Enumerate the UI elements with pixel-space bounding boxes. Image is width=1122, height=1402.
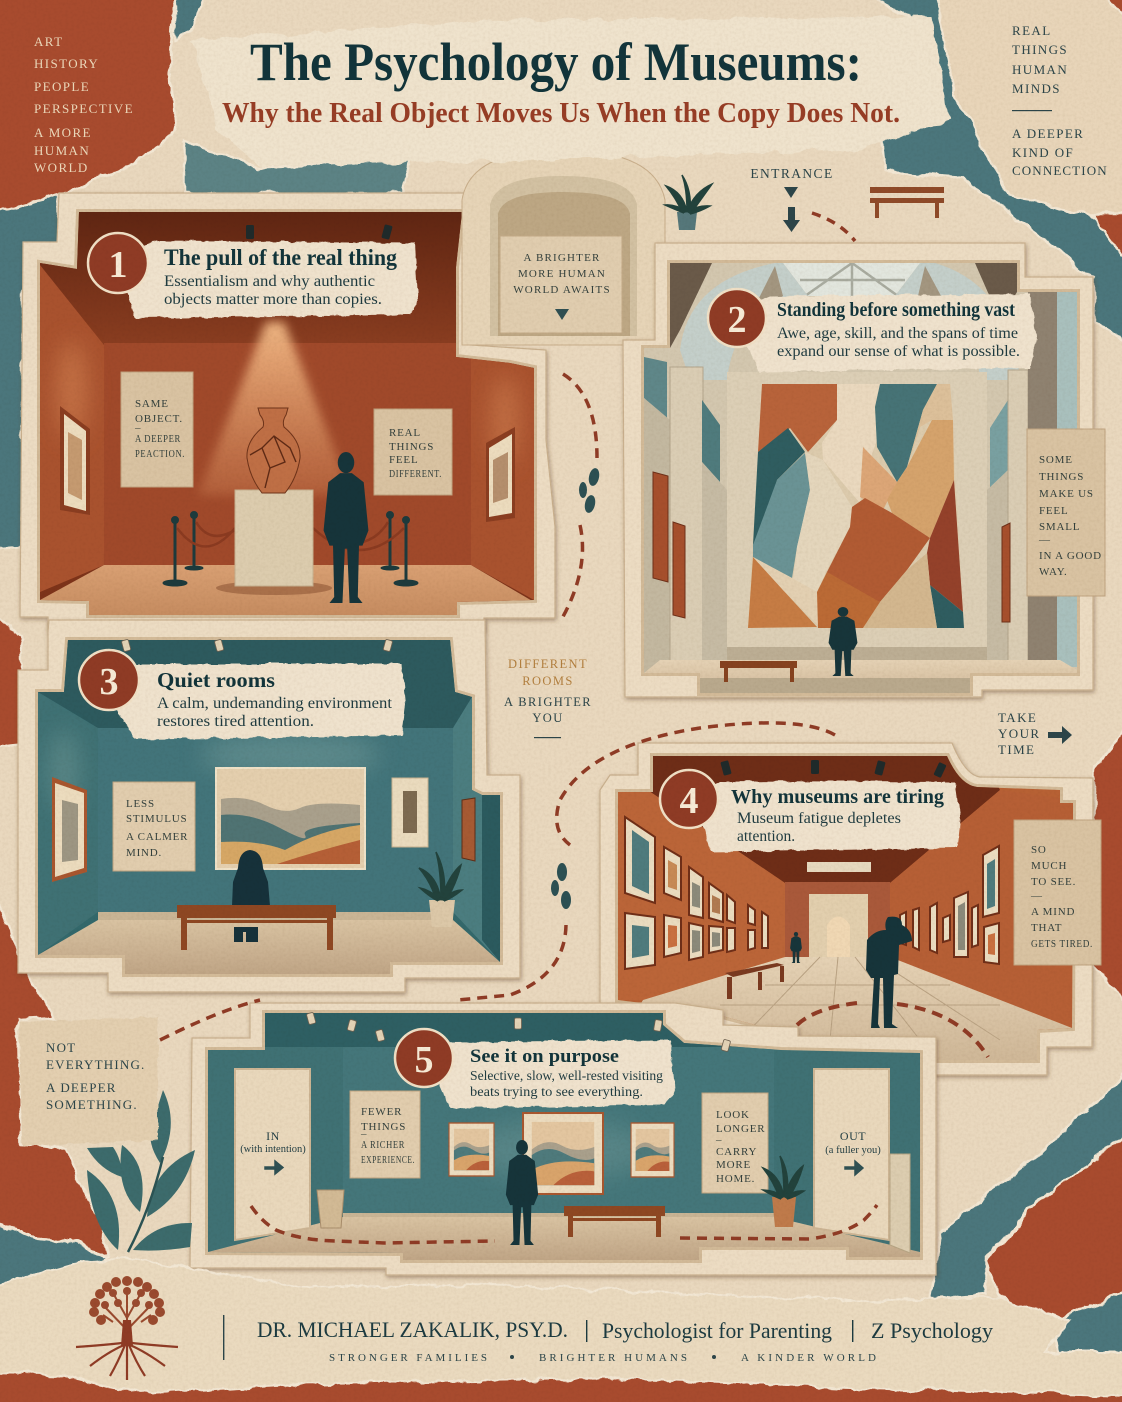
track lights: [121, 639, 393, 652]
take your time: YOUR: [998, 726, 1040, 741]
artworks: [449, 1113, 674, 1194]
centre caption: A BRIGHTER: [504, 695, 592, 709]
vase: [247, 408, 300, 493]
frame: left wall: [52, 777, 87, 882]
note paper: not everything: A DEEPER: [46, 1080, 117, 1095]
sign: fewer things: [350, 1091, 420, 1178]
sign: same object: [121, 372, 193, 487]
top right tagline: [1012, 23, 1108, 178]
sign: same object: PEACTION.: [135, 448, 185, 460]
sign: look longer: CARRY: [716, 1146, 757, 1158]
sign: look longer: LONGER: [716, 1123, 765, 1135]
sign: so much to see: [1014, 820, 1101, 965]
picture contents left: [632, 830, 720, 958]
sign: so much to see: —: [1030, 890, 1043, 902]
room 2 interior: [640, 258, 1085, 698]
right wall: [453, 697, 500, 962]
tired visitor: [866, 917, 912, 1028]
sign: brighter world: [500, 236, 622, 333]
note paper: not everything: NOT: [46, 1040, 76, 1055]
label: 1: The pull of the real thing: [164, 245, 397, 270]
dashed path through room: [251, 1205, 877, 1243]
room 3 interior: [30, 635, 510, 980]
left inner wall: [702, 462, 727, 660]
sign: fewer things: THINGS: [361, 1121, 406, 1133]
door: in: (with intention): [240, 1144, 306, 1155]
framed pictures left: [625, 817, 768, 969]
visitor: [324, 452, 368, 603]
sign: feel small: FEEL: [1039, 505, 1068, 517]
sign: so much to see: SO: [1031, 844, 1047, 856]
ceiling: [38, 635, 472, 728]
top right tagline: CONNECTION: [1012, 163, 1108, 178]
label: 2: expand our sense of what is possible.: [777, 343, 1020, 360]
footprints lower: [551, 863, 571, 909]
sign: real things: FEEL: [389, 454, 418, 466]
room 1 interior: [30, 205, 540, 620]
label: 4: attention.: [737, 828, 795, 845]
entrance bench: [870, 187, 944, 218]
sign: look longer: MORE: [716, 1159, 751, 1171]
spotlight: [198, 322, 352, 495]
sign: feel small: WAY.: [1039, 566, 1068, 578]
right teal wall: [1057, 292, 1077, 667]
sign: feel small: THINGS: [1039, 471, 1084, 483]
label: 3: A calm, undemanding environment: [157, 695, 393, 712]
back wall: [785, 882, 890, 957]
floor: [200, 1217, 920, 1265]
left teal window: [702, 400, 720, 482]
right inner wall: [987, 470, 1008, 660]
top left tagline: A MORE: [34, 125, 92, 140]
sign: feel small: SOME: [1039, 454, 1073, 466]
label: 2: [708, 289, 1037, 372]
floor: [644, 660, 1077, 698]
label: 1: objects matter more than copies.: [164, 291, 382, 308]
sign: real things: REAL: [389, 427, 421, 439]
ceiling: [40, 205, 480, 345]
top left tagline: ART: [34, 34, 63, 49]
bench: [725, 963, 784, 999]
label: 5: 5: [414, 1039, 434, 1081]
right column: [1008, 370, 1028, 667]
vault arches: [680, 263, 1020, 380]
frame: left wall: [60, 406, 90, 515]
entrance marker: [750, 166, 834, 232]
icon: tree logo: [76, 1276, 178, 1380]
label: 3: [79, 650, 406, 739]
top left tagline: [34, 34, 134, 175]
top left tagline: PEOPLE: [34, 79, 90, 94]
dashed walking path: centre: [160, 374, 835, 1040]
centre caption: [504, 657, 592, 738]
label: 2: Standing before something vast: [777, 299, 1015, 321]
top right tagline: A DEEPER: [1012, 126, 1084, 141]
label: 2: Awe, age, skill, and the spans of time: [777, 325, 1018, 342]
visitor: [506, 1140, 538, 1245]
entrance marker: ENTRANCE: [750, 166, 834, 181]
footer tagline: BRIGHTER HUMANS: [539, 1352, 687, 1364]
doorway: [809, 894, 868, 958]
panel: room 2 standing before something vast: [623, 243, 1105, 698]
track lights: [246, 224, 393, 240]
door: out: (a fuller you): [825, 1145, 881, 1156]
dashed trail from entrance: [812, 213, 855, 241]
door: in: [235, 1069, 310, 1240]
centre caption: YOU: [532, 711, 564, 725]
plant: [763, 1156, 804, 1227]
right teal window: [990, 400, 1008, 490]
wastebasket: [317, 1190, 344, 1228]
take your time: TAKE: [998, 710, 1037, 725]
icon: botanical leaves: [87, 1090, 195, 1252]
label: 5: Selective, slow, well-rested visiting: [470, 1068, 663, 1083]
back wall: [98, 728, 453, 912]
right wall: [471, 350, 534, 600]
footer credits: Z Psychology: [871, 1318, 993, 1343]
label: 1: 1: [108, 244, 128, 286]
door: in: IN: [266, 1129, 280, 1143]
bench: [177, 905, 336, 950]
left column: [670, 367, 703, 663]
centre caption: ROOMS: [522, 674, 574, 688]
sign: less stimulus: [113, 782, 195, 871]
top right tagline: MINDS: [1012, 81, 1061, 96]
vase cracks: [250, 436, 296, 488]
entrance plant: [665, 175, 712, 230]
plant: [419, 852, 462, 927]
footer tagline: [329, 1352, 876, 1364]
sign: feel small: [1027, 429, 1105, 596]
back wall: [343, 1047, 774, 1213]
label: 4: Museum fatigue depletes: [737, 810, 901, 827]
sign: so much to see: GETS TIRED.: [1031, 938, 1093, 950]
left wall: [38, 692, 98, 955]
distant visitor: [790, 932, 802, 963]
sign: so much to see: TO SEE.: [1031, 876, 1076, 888]
sign: look longer: [702, 1093, 768, 1193]
top right tagline: REAL: [1012, 23, 1052, 38]
room 5 interior: [200, 1005, 930, 1265]
sign: brighter world: A BRIGHTER: [523, 252, 601, 264]
left side wall: [644, 398, 670, 673]
sign: fewer things: –: [360, 1128, 367, 1140]
sign: feel small: IN A GOOD: [1039, 550, 1102, 562]
door: out: OUT: [840, 1129, 866, 1143]
kiosk: [890, 1154, 910, 1253]
frame: right wall: [486, 427, 515, 522]
label: 3: Quiet rooms: [157, 668, 275, 692]
sign: feel small: —: [1038, 534, 1051, 546]
bench: [720, 661, 797, 682]
framed pictures right: [900, 846, 999, 964]
sign: less stimulus: A CALMER: [126, 831, 188, 843]
right dark wall: [1028, 292, 1057, 667]
ceiling skylight: [807, 862, 871, 872]
sign: fewer things: A RICHER: [361, 1139, 405, 1151]
landscape painting: [216, 768, 365, 869]
sign: look longer: –: [715, 1134, 722, 1146]
right gallery wall: [890, 790, 1073, 1028]
label: 2: 2: [728, 299, 746, 341]
label: 5: See it on purpose: [470, 1046, 619, 1067]
wall glows: [58, 340, 517, 465]
left gallery wall: [618, 770, 785, 1000]
label: 3: 3: [100, 661, 118, 703]
sign: so much to see: A MIND: [1031, 906, 1075, 918]
stanchions and ropes: [163, 512, 418, 586]
label: 4: 4: [680, 780, 698, 822]
track lights: [306, 1012, 731, 1052]
sign: same object: A DEEPER: [135, 433, 181, 445]
visitor: [829, 607, 857, 676]
sign: less stimulus: LESS: [126, 798, 155, 810]
footer credits: [257, 1317, 993, 1343]
pedestal: [216, 490, 332, 595]
sign: real things: DIFFERENT.: [389, 468, 442, 480]
top right tagline: THINGS: [1012, 42, 1068, 57]
label: 1: Essentialism and why authentic: [164, 273, 375, 290]
floor: [600, 957, 1072, 1070]
wall glow: [470, 1120, 650, 1180]
sign: so much to see: THAT: [1031, 922, 1062, 934]
footer credits: Psychologist for Parenting: [602, 1318, 832, 1343]
baseboard: [343, 1213, 774, 1218]
panel: arch entrance: [462, 150, 665, 345]
centre caption: DIFFERENT: [508, 657, 588, 671]
wall glows: [50, 730, 380, 810]
back wall: [104, 343, 471, 565]
sign: same object: SAME: [135, 398, 169, 410]
sign: brighter world: WORLD AWAITS: [513, 284, 611, 296]
label: 4: Why museums are tiring: [731, 786, 944, 808]
top right tagline: HUMAN: [1012, 62, 1068, 77]
track lights: [720, 760, 947, 778]
sign: feel small: MAKE US: [1039, 488, 1094, 500]
top left tagline: PERSPECTIVE: [34, 101, 134, 116]
note paper: not everything: SOMETHING.: [46, 1097, 138, 1112]
door: out: [814, 1069, 889, 1240]
skylight: [783, 263, 920, 296]
sign: look longer: HOME.: [716, 1173, 755, 1185]
take your time: [998, 710, 1072, 757]
sign: less stimulus: STIMULUS: [126, 813, 187, 825]
label: 5: beats trying to see everything.: [470, 1084, 643, 1099]
sign: fewer things: FEWER: [361, 1106, 402, 1118]
left wall: [40, 265, 104, 592]
sign: same object: OBJECT.: [135, 413, 183, 425]
top left tagline: HUMAN: [34, 143, 90, 158]
note paper: not everything: EVERYTHING.: [46, 1057, 146, 1072]
dark spandrels: [670, 263, 1017, 348]
label: 4: [660, 770, 960, 852]
title paper: [192, 17, 948, 166]
take your time: TIME: [998, 742, 1035, 757]
label: 5: [395, 1029, 675, 1108]
ceiling: [260, 1005, 790, 1047]
bench: [564, 1206, 665, 1237]
sign: brighter world: MORE HUMAN: [518, 268, 606, 280]
top left tagline: HISTORY: [34, 56, 99, 71]
side frames: [653, 472, 1010, 622]
sign: real things: [374, 409, 452, 495]
panel: room 3 quiet rooms: [18, 620, 520, 992]
left upper teal window: [644, 357, 667, 420]
floor: [30, 920, 500, 980]
footer paper: [0, 1258, 1122, 1396]
label: 1: [88, 233, 418, 318]
footer divider: [223, 1315, 224, 1360]
baseboard: [98, 912, 453, 920]
label: 3: restores tired attention.: [157, 713, 314, 730]
top left tagline: WORLD: [34, 160, 89, 175]
panel: room 5 see it on purpose: [190, 1003, 936, 1275]
footprints upper: [579, 467, 601, 514]
sign: so much to see: MUCH: [1031, 860, 1067, 872]
sign: real things: THINGS: [389, 441, 434, 453]
giant collage artwork: [748, 384, 964, 628]
footer credits: DR. MICHAEL ZAKALIK, PSY.D.: [257, 1317, 568, 1342]
sign: feel small: SMALL: [1039, 521, 1080, 533]
dashed path on floor: [797, 1003, 988, 1057]
sign: look longer: LOOK: [716, 1109, 750, 1121]
sign: fewer things: EXPERIENCE.: [361, 1154, 415, 1166]
panel: room 4 museum fatigue: [600, 743, 1101, 1075]
sign: same object: –: [134, 422, 141, 434]
back wall: [727, 372, 987, 648]
room 4 interior: [600, 750, 1080, 1070]
top right tagline: KIND OF: [1012, 145, 1074, 160]
subtitle: Why the Real Object Moves Us When the Copy Does Not.: [222, 97, 900, 129]
panel: room 1 real thing: [20, 193, 555, 630]
footer tagline: STRONGER FAMILIES: [329, 1352, 487, 1364]
frame: right small: [392, 778, 428, 847]
floor: [40, 565, 534, 620]
ceiling: [610, 750, 1000, 883]
note paper: not everything: [19, 1017, 158, 1146]
picture contents right: [958, 859, 995, 955]
footer tagline: A KINDER WORLD: [741, 1352, 876, 1364]
sign: less stimulus: MIND.: [126, 847, 162, 859]
main title: The Psychology of Museums:: [250, 32, 862, 92]
seated visitor: [232, 850, 270, 942]
frame: side wall: [462, 798, 475, 861]
